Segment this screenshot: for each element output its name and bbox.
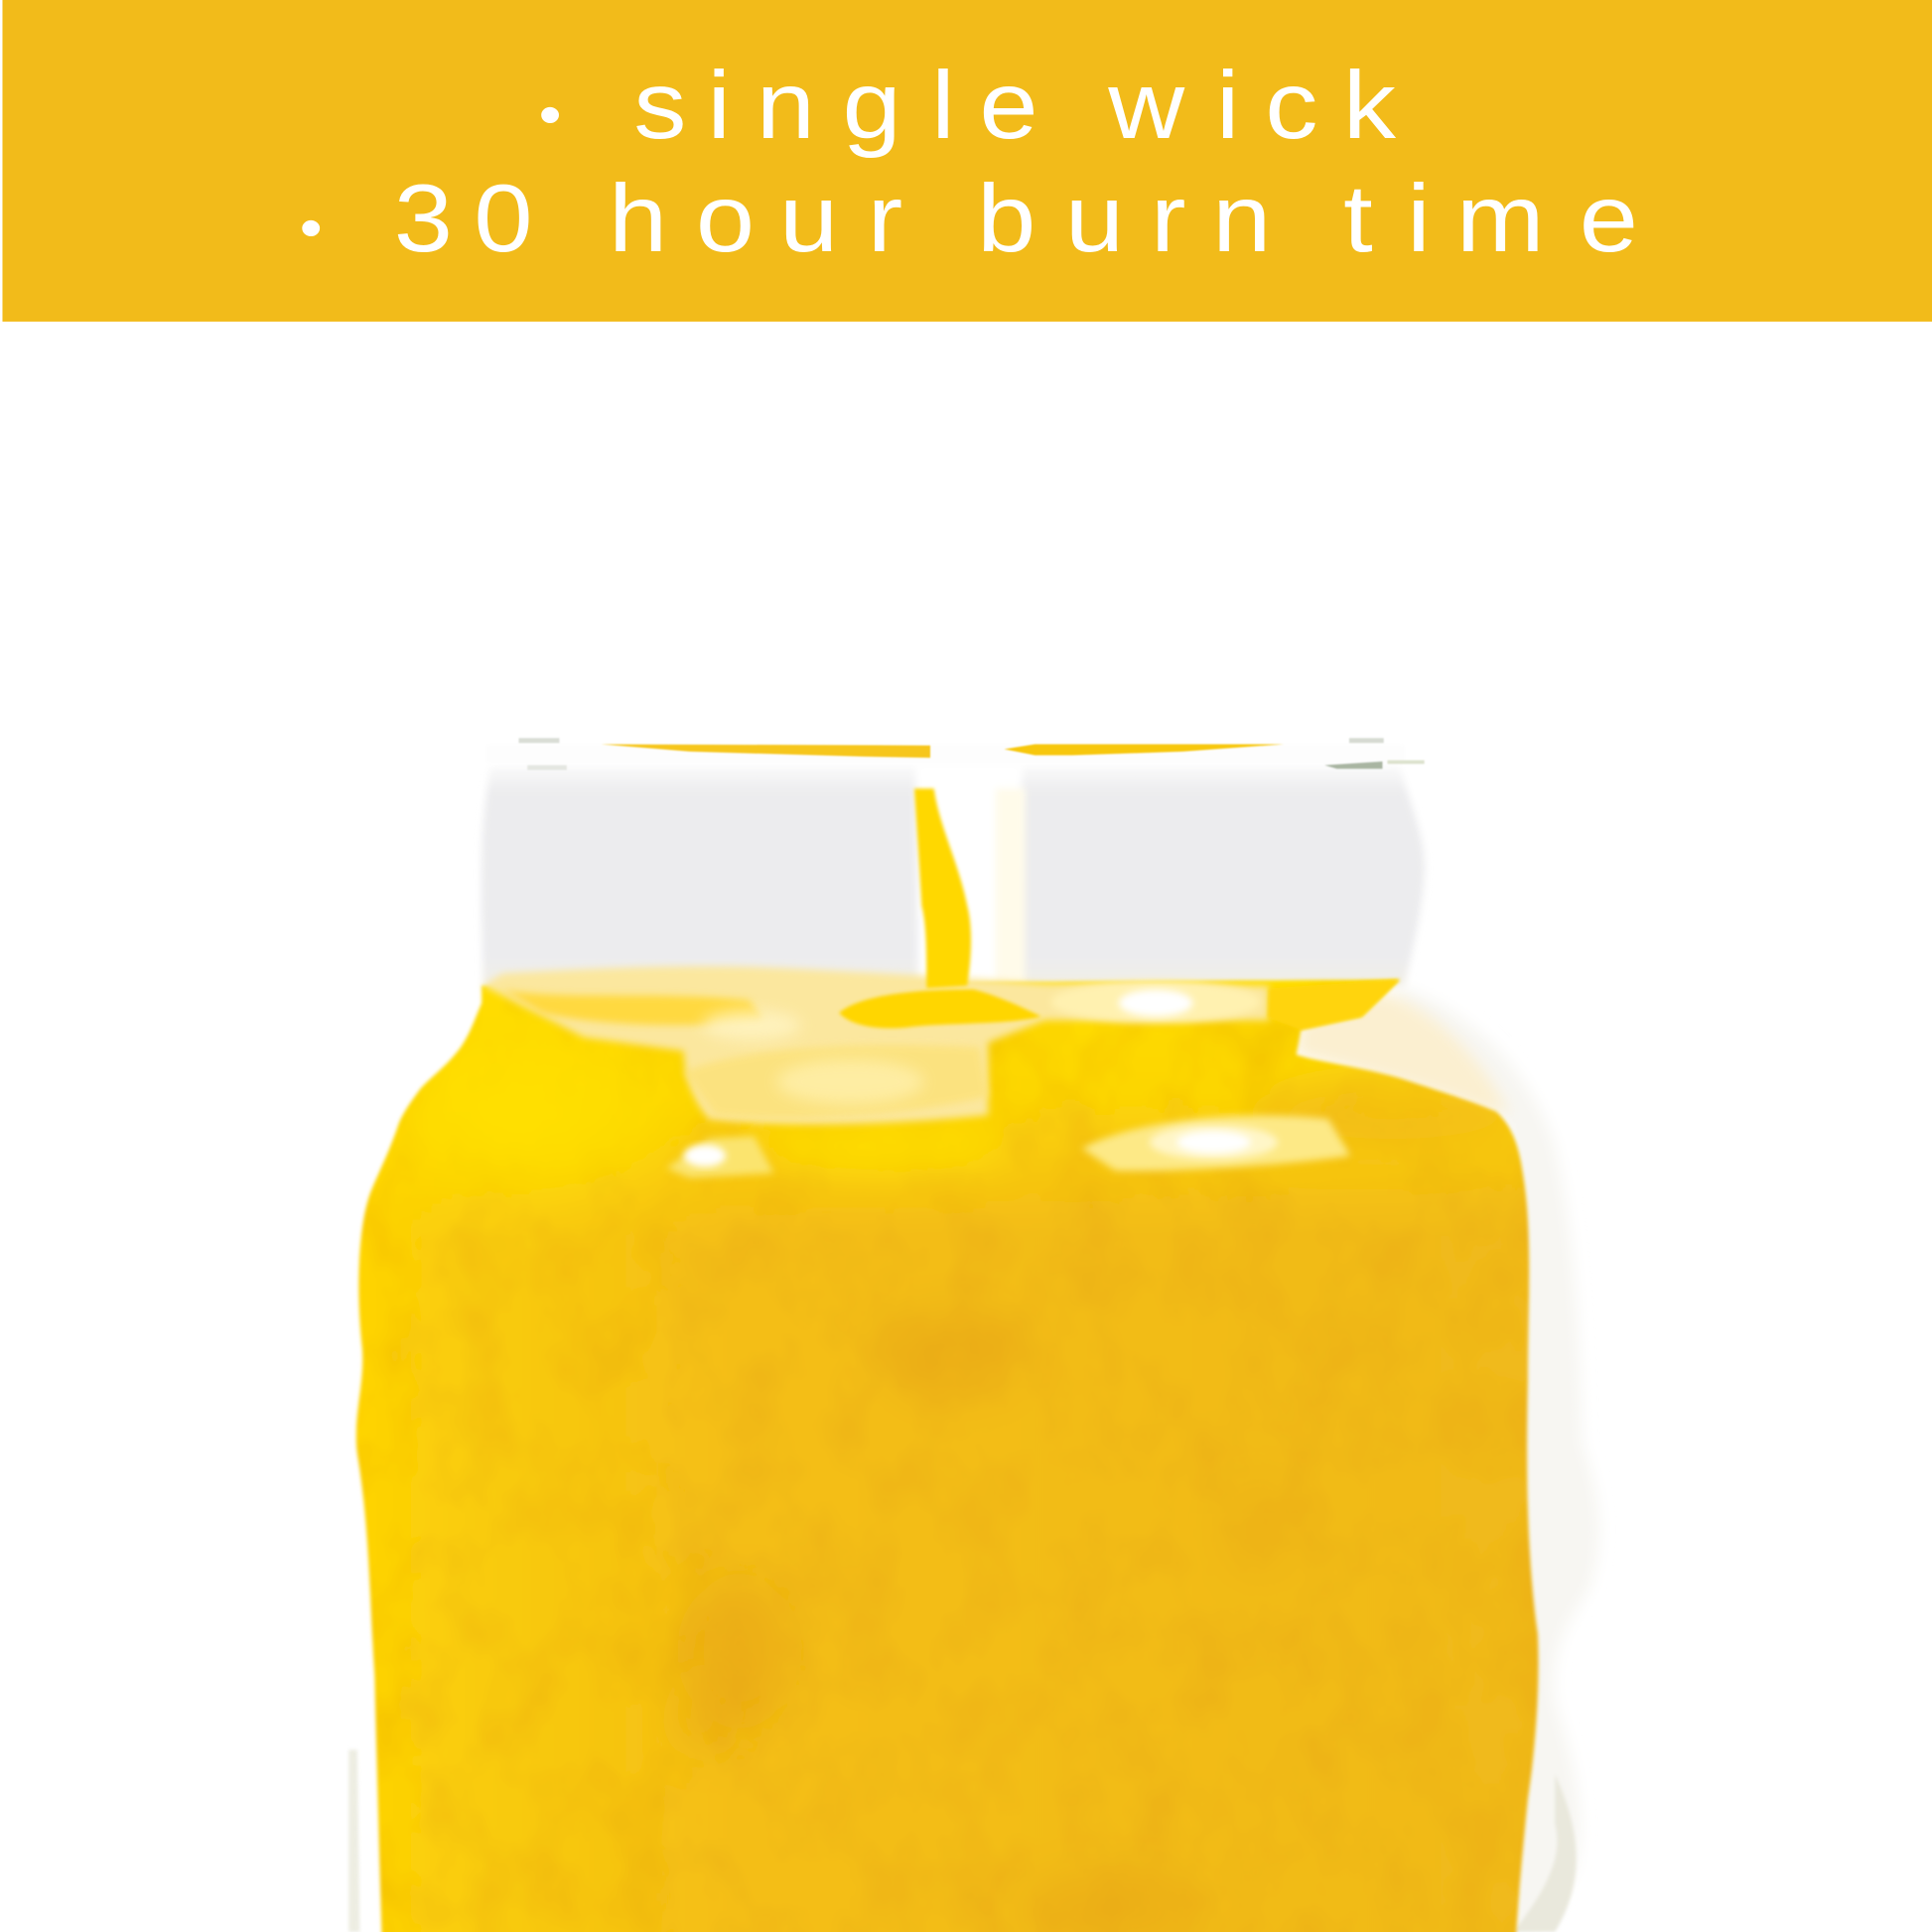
- wax body: [345, 961, 1565, 1932]
- feature text: single wick: wick: [1107, 51, 1397, 159]
- feature text: single wick: •: [539, 81, 562, 148]
- feature text: 30 hour burn time: 30: [394, 165, 533, 272]
- feature text: 30 hour burn time: •: [300, 195, 323, 261]
- feature text: 30 hour burn time: burn: [977, 165, 1271, 272]
- feature text: 30 hour burn time: [300, 165, 1638, 272]
- banner: [2, 0, 1932, 322]
- wax top surface: [483, 966, 1400, 1124]
- feature text: 30 hour burn time: time: [1343, 165, 1638, 272]
- glass neck: [482, 745, 1425, 998]
- feature text: single wick: single: [633, 51, 1038, 159]
- highlights on glass: [666, 981, 1350, 1177]
- wick: [914, 788, 971, 988]
- candle jar: [345, 738, 1599, 1932]
- feature text: 30 hour burn time: hour: [609, 165, 902, 272]
- outer glass edge: [348, 986, 1599, 1932]
- feature text: single wick: [539, 51, 1397, 159]
- jar rim: [518, 738, 1425, 770]
